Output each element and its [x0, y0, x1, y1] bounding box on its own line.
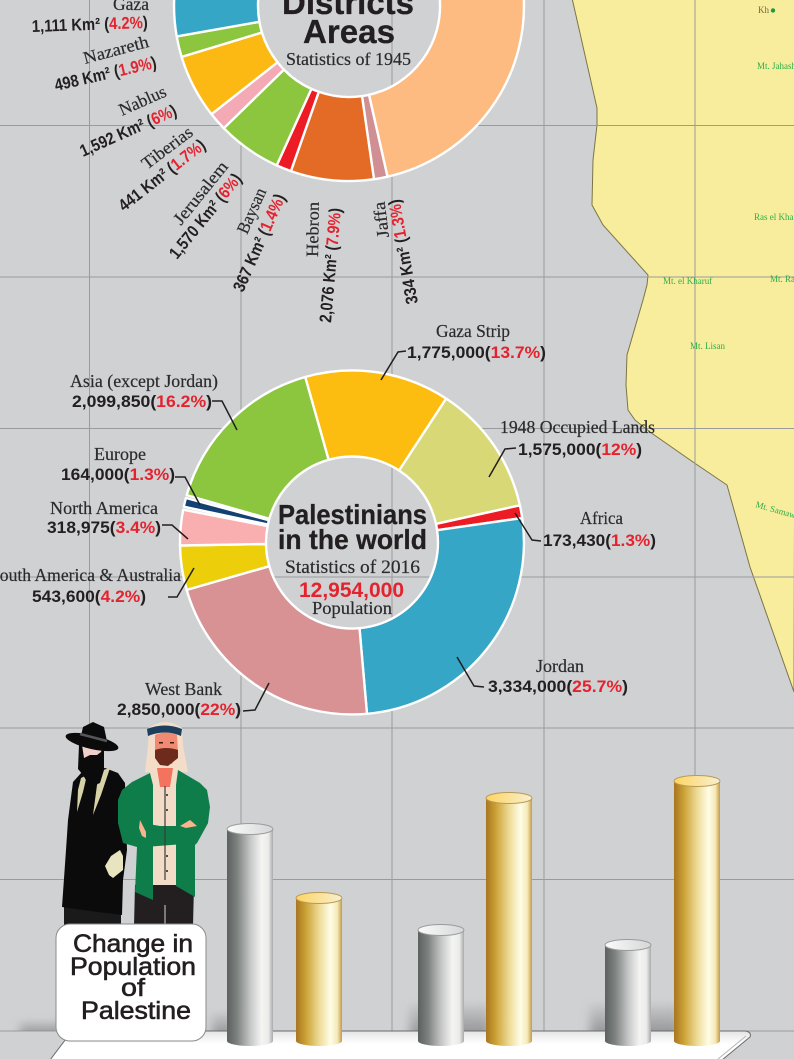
label: Tiberias: 441 Km² (1.7%): [115, 136, 209, 215]
heading: Palestinians in the world: in the world: [278, 524, 427, 555]
label: 1948 Occupied Lands: 1948 Occupied Lands: [500, 417, 655, 437]
slice: Africa: [436, 505, 522, 530]
title card: change in population of Palestine: of: [121, 974, 145, 1002]
label: Asia: [70, 371, 237, 430]
slice: Tiberias: [212, 62, 284, 128]
label: Africa: [515, 508, 656, 550]
map: yellow land area: [572, 0, 794, 692]
heading: Palestinians in the world: Population: [312, 598, 392, 618]
heading: Palestinians in the world: [278, 499, 427, 618]
left jacket side: [118, 773, 153, 900]
illustration: man in green jacket and keffiyeh: [118, 722, 210, 926]
map: place labels: Mt. Lisan: [690, 341, 725, 351]
label: Asia: 2,099,850(16.2%): [72, 392, 212, 411]
label: Gaza: 1,111 Km² (4.2%): [31, 13, 148, 36]
illustration: man in black coat and hat: [62, 722, 127, 926]
label: Europe: Europe: [94, 444, 146, 464]
slice: Nablus: [182, 32, 278, 114]
legs: [64, 905, 121, 926]
map: place labels: Mt. el Kharuf: [663, 276, 712, 286]
heading: districts areas: [282, 0, 414, 69]
label: Jaffa: Jaffa: [369, 201, 393, 239]
label: Jordan: [457, 656, 628, 696]
label: Tiberias: Tiberias: [137, 122, 197, 173]
heading: districts areas: Statistics of 1945: [286, 49, 411, 69]
slice: Europe: [184, 498, 269, 525]
head band: [147, 726, 182, 736]
label: Europe: [61, 444, 200, 505]
heading: Palestinians in the world: Palestinians: [278, 499, 427, 530]
slice: South America and Australia: [180, 544, 269, 590]
platform: [50, 1031, 750, 1059]
bar: silver 1: [227, 824, 273, 1046]
label: Gaza Strip: Gaza Strip: [436, 321, 510, 341]
title card: change in population of Palestine: [56, 924, 206, 1041]
label: Jordan: 3,334,000(25.7%): [488, 677, 628, 696]
label: Hebron: Hebron: [302, 201, 323, 257]
hat brim: [64, 729, 120, 755]
slice: West Bank: [187, 566, 367, 714]
label: Africa: 173,430(1.3%): [543, 531, 656, 550]
prayer shawl stripes: [77, 775, 87, 812]
label: North America: 318,975(3.4%): [47, 518, 161, 537]
slice: Jerusalem: [224, 70, 311, 165]
crossed arms: [137, 822, 208, 847]
slice: Baysan: [277, 89, 319, 171]
label: Asia: Asia (except Jordan): [70, 371, 218, 391]
donut chart: Palestinians in the world: [180, 371, 524, 714]
label: West Bank: West Bank: [145, 679, 222, 699]
beard: [78, 744, 104, 787]
label: Nablus: 1,592 Km² (6%): [77, 101, 180, 161]
title card: change in population of Palestine: Palestine: [81, 997, 191, 1025]
label: Europe: 164,000(1.3%): [61, 465, 175, 484]
hat crown: [80, 722, 108, 746]
shirt and chest: [150, 770, 180, 885]
title card: change in population of Palestine: Population: [70, 953, 196, 981]
bar: gold 3: [674, 776, 720, 1046]
slice: Hebron: [291, 92, 374, 181]
label: Nablus: Nablus: [115, 81, 169, 120]
slice: Asia: [187, 377, 329, 519]
label: Jaffa: [369, 198, 422, 306]
label: Nazareth: 498 Km² (1.9%): [53, 53, 158, 95]
label: Hebron: [302, 201, 345, 323]
map: place labels: [663, 5, 794, 520]
label: North America: [47, 498, 188, 539]
label: Jaffa: 334 Km² (1.3%): [385, 198, 422, 306]
label: West Bank: 2,850,000(22%): [117, 700, 241, 719]
label: Nazareth: [53, 31, 158, 95]
label: Africa: Africa: [580, 508, 623, 528]
label: Gaza Strip: [381, 321, 546, 380]
map: place labels: Kh: [758, 5, 769, 15]
hand: [105, 850, 123, 878]
label: Gaza: [31, 0, 149, 36]
slice: Gaza: [174, 0, 259, 36]
label: Hebron: 2,076 Km² (7.9%): [316, 207, 345, 323]
label: Jerusalem: 1,570 Km² (6%): [165, 170, 246, 263]
right jacket side: [176, 770, 210, 897]
label: South America and Australia: 543,600(4.2%): [32, 587, 146, 606]
heading: Palestinians in the world: 12,954,000: [299, 579, 404, 602]
label: Baysan: 367 Km² (1.4%): [229, 191, 289, 295]
slice: North America: [180, 510, 268, 546]
heading: districts areas: Areas: [303, 13, 395, 50]
label: West Bank: [117, 679, 269, 719]
label: Nazareth: Nazareth: [81, 31, 151, 68]
bar: silver 3: [605, 940, 651, 1046]
heading: Palestinians in the world: Statistics of 2016: [285, 558, 420, 578]
label: 1948 Occupied Lands: 1,575,000(12%): [518, 440, 642, 459]
label: Jerusalem: Jerusalem: [169, 157, 232, 229]
bar: gold 1: [296, 892, 342, 1046]
slice: Jordan: [360, 518, 524, 714]
face: [155, 732, 178, 764]
slice: peach: [369, 0, 524, 177]
title card: change in population of Palestine: Change in: [73, 930, 193, 958]
keffiyeh: [145, 722, 188, 772]
bar: gold 2: [486, 792, 532, 1046]
label: South America and Australia: [0, 565, 194, 606]
slice: Jaffa: [362, 95, 388, 179]
trousers: [134, 885, 194, 926]
coat: [62, 768, 127, 915]
label: North America: North America: [50, 498, 158, 518]
bar: silver 2: [418, 924, 464, 1046]
label: Jordan: Jordan: [536, 656, 584, 676]
label: Gaza Strip: 1,775,000(13.7%): [407, 343, 546, 362]
face: [80, 738, 104, 768]
slice: 1948 Occupied Lands: [399, 399, 520, 524]
donut chart: districts areas 1945: [174, 0, 524, 181]
slice: Nazareth: [177, 22, 262, 57]
map: place labels: Ras el Kha: [754, 212, 794, 222]
shirt placket: [164, 786, 166, 880]
label: Baysan: Baysan: [232, 184, 270, 237]
slice: Gaza Strip: [305, 371, 446, 470]
label: 1948 Occupied Lands: [489, 417, 655, 477]
